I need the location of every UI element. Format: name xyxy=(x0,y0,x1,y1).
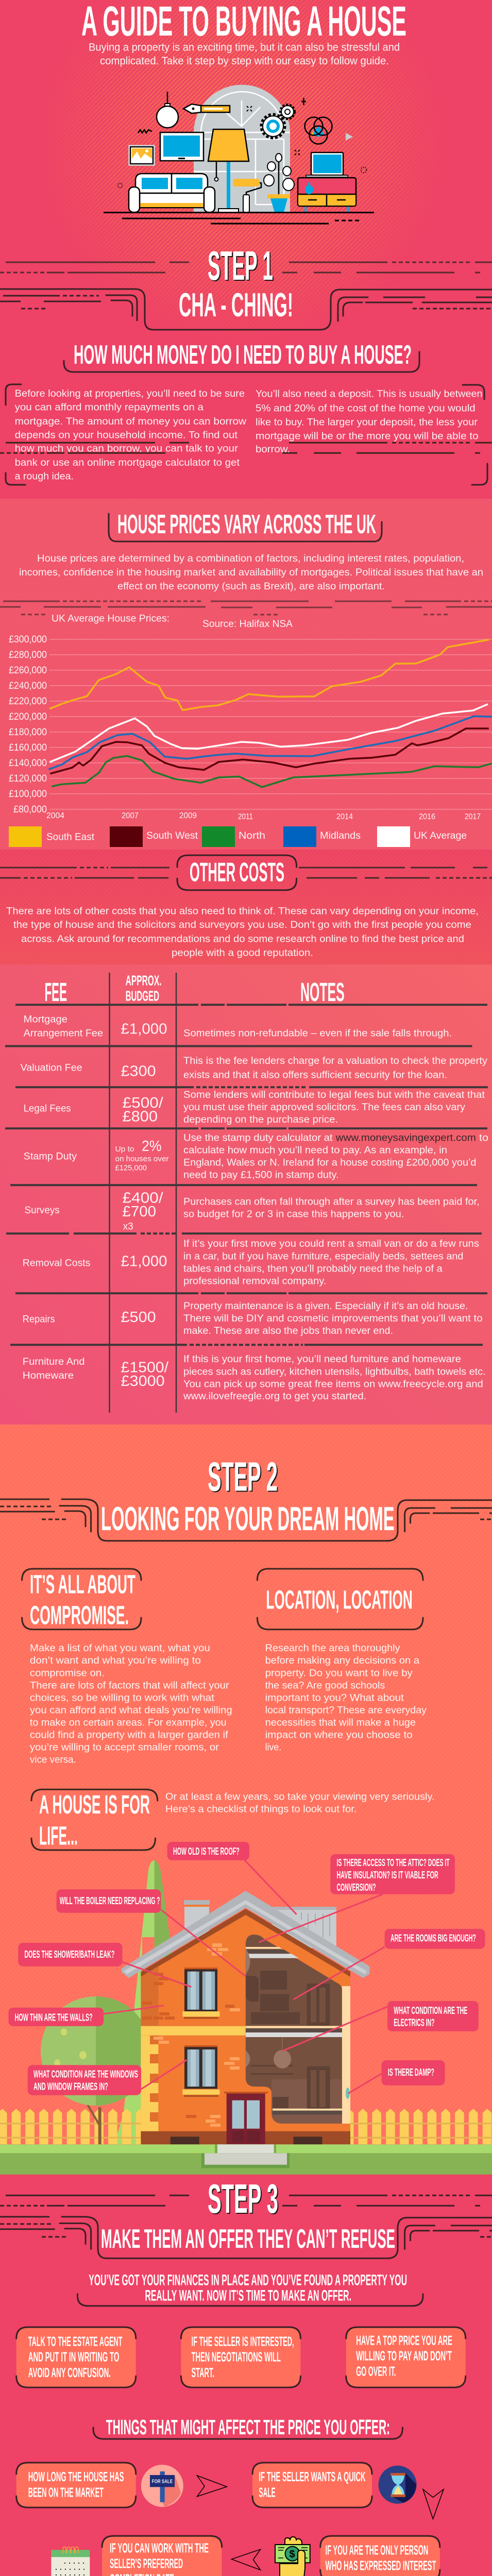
background: cost table panel xyxy=(0,964,492,1425)
row: stamp duty: to xyxy=(479,1132,488,1143)
factor box: time on market: HOW LONG THE HOUSE HAS xyxy=(28,2469,124,2484)
factor box: completion date: SELLER’S PREFERRED xyxy=(110,2555,183,2571)
row: removal costs: tables and chairs, then you’ll probably need the help of a xyxy=(183,1263,443,1274)
small play triangle xyxy=(346,133,353,141)
deposit left column: a rough idea. xyxy=(15,471,74,482)
row: surveys: £400/ xyxy=(123,1190,164,1206)
step 3 heading xyxy=(0,2176,492,2258)
two column text panel xyxy=(6,384,487,485)
legend: UK Average xyxy=(414,831,467,841)
row: legal fees: £800 xyxy=(123,1109,158,1125)
line chart: UK average house prices xyxy=(9,614,492,847)
factor box: time on market: BEEN ON THE MARKET xyxy=(28,2485,104,2500)
location text: before making any decisions on a xyxy=(265,1655,419,1666)
deposit left column: mortgage. The amount of money you can borrow xyxy=(15,416,247,427)
row: removal costs xyxy=(23,1239,479,1286)
compromise text: compromise on. xyxy=(30,1668,105,1679)
row: valuation fee: Valuation Fee xyxy=(21,1062,82,1073)
callout: electrics: ELECTRICS IN? xyxy=(394,2018,435,2029)
cha-ching heading: CHA - CHING! xyxy=(179,286,293,324)
callout: walls xyxy=(8,2006,164,2026)
x axis labels: 2004 xyxy=(46,811,64,820)
y axis labels: £280,000 xyxy=(9,650,47,660)
illustration: house cross-section xyxy=(0,1860,492,2175)
checklist callouts xyxy=(8,1842,485,2095)
deposit right column: You’ll also need a deposit. This is usually between xyxy=(256,388,483,400)
row: stamp duty: England, Wales or N. Ireland for a house costing £200,000 you’d xyxy=(183,1157,476,1168)
row: valuation fee xyxy=(21,1056,488,1080)
framed picture xyxy=(129,145,155,165)
row: mortgage arrangement fee: £1,000 xyxy=(121,1021,167,1038)
a house is for life heading: LIFE... xyxy=(39,1821,78,1851)
roof underside band xyxy=(141,1909,350,1977)
floor lines xyxy=(104,212,374,224)
location text: important to you? What about xyxy=(265,1692,404,1703)
legend: North xyxy=(239,831,265,841)
series: South East xyxy=(49,640,489,710)
pen tool xyxy=(183,104,230,113)
compromise frame xyxy=(22,1569,141,1630)
deposit right column: 5% and 20% of the cost of the home you would xyxy=(256,402,476,414)
compromise text: you’re willing to accept smaller rooms, or xyxy=(30,1742,219,1753)
deposit left column: bank or use an online mortgage calculator to get xyxy=(15,457,240,468)
step 3 rules xyxy=(0,2195,492,2206)
factor box: time on market xyxy=(16,2463,136,2507)
callout: windows: WHAT CONDITION ARE THE WINDOWS xyxy=(33,2069,138,2080)
sofa xyxy=(129,174,215,212)
callout: damp: IS THERE DAMP? xyxy=(388,2067,434,2078)
row: repairs: make. These are also the jobs than never end. xyxy=(183,1326,393,1336)
y axis labels: £80,000 xyxy=(13,804,47,815)
checklist intro text: Or at least a few years, so take your viewing very seriously. xyxy=(165,1791,435,1802)
row: stamp duty: £125,000 xyxy=(115,1164,147,1173)
compromise text: vice versa. xyxy=(30,1754,76,1765)
y axis labels xyxy=(9,634,47,815)
factor box: only person xyxy=(320,2536,440,2576)
series: South West xyxy=(50,728,489,774)
row: stamp duty: Stamp Duty xyxy=(24,1151,77,1162)
step rules xyxy=(0,262,492,273)
compromise text: to make on certain areas. For example, you xyxy=(30,1717,227,1728)
row: repairs: Property maintenance is a given. Especially if it’s an old house. xyxy=(183,1301,468,1312)
row: furniture and homeware: pieces such as cutlery, kitchen utensils, lightbulbs, bath towels etc. xyxy=(183,1366,486,1377)
location text: impact on where you choose to xyxy=(265,1730,413,1740)
illustration: furnished room xyxy=(104,85,374,224)
row: stamp duty: Up to xyxy=(115,1145,134,1154)
tip box: estate agent: TALK TO THE ESTATE AGENT xyxy=(28,2333,123,2349)
step 2 heading xyxy=(0,443,492,1541)
venn diagram xyxy=(305,117,332,144)
row: stamp duty: on houses over xyxy=(115,1155,169,1163)
deposit left column: depends on your household income. To find out xyxy=(15,430,238,441)
row: stamp duty xyxy=(24,1132,488,1180)
foundation xyxy=(141,2131,350,2144)
row: furniture and homeware: If this is your first home, you’ll need furniture and homeware xyxy=(183,1354,461,1365)
location block xyxy=(257,1569,427,1753)
row: stamp duty: calculate how much you’ll need to pay. As an example, in xyxy=(183,1145,447,1156)
deposit right column: like to buy. The larger your deposit, the less your xyxy=(256,417,478,428)
legend: South East xyxy=(46,832,95,843)
row: furniture and homeware: www.ilovefreegle.org to get you started. xyxy=(183,1391,366,1402)
cypress tree xyxy=(114,1860,173,2144)
table header xyxy=(44,973,345,1007)
a house is for life heading xyxy=(31,1789,158,1851)
compromise block xyxy=(22,1569,232,1765)
house walls xyxy=(141,1915,350,2131)
row: furniture and homeware xyxy=(23,1354,486,1402)
row: stamp duty: www.moneysavingexpert.com xyxy=(335,1132,476,1143)
callout: windows xyxy=(28,2060,186,2095)
row: surveys xyxy=(25,1190,480,1232)
background: intro and step 1 panel xyxy=(0,0,492,499)
other costs heading xyxy=(0,855,492,890)
location text: necessities that will make a huge xyxy=(265,1717,416,1728)
row: furniture and homeware: £1500/ xyxy=(121,1359,169,1376)
x axis labels: 2017 xyxy=(465,812,481,821)
offer frame xyxy=(0,2217,492,2258)
x axis labels xyxy=(46,811,481,821)
intro text: Buying a property is an exciting time, but it can also be stressful and xyxy=(89,41,400,54)
row: valuation fee: exists and that it also offers sufficient security for the loan. xyxy=(183,1070,447,1080)
other costs text: across. Ask around for recommendations and do some research online to find the best price and xyxy=(21,933,464,944)
back extension and chimney xyxy=(184,1900,336,1948)
other costs text: There are lots of other costs that you also need to think of. These can vary depending on your income, xyxy=(6,905,479,917)
factor box: completion date: IF YOU CAN WORK WITH THE xyxy=(110,2540,209,2555)
row: repairs xyxy=(23,1301,483,1336)
location text xyxy=(265,1643,427,1753)
round tree xyxy=(41,1996,151,2144)
tip box: negotiations: THEN NEGOTIATIONS WILL xyxy=(192,2349,281,2364)
factor box: quick sale: SALE xyxy=(259,2485,276,2500)
location text: Research the area thoroughly xyxy=(265,1643,400,1654)
row: surveys: £700 xyxy=(123,1204,156,1220)
tip box: estate agent: AVOID ANY CONFUSION. xyxy=(28,2365,111,2380)
background: step 3 panel xyxy=(0,2174,492,2576)
other costs heading: OTHER COSTS xyxy=(190,858,284,888)
a house is for life heading: A HOUSE IS FOR xyxy=(39,1790,150,1819)
y axis labels: £160,000 xyxy=(9,742,47,753)
deposit left column: how much you can borrow, you can talk to your xyxy=(15,443,239,454)
interior furniture xyxy=(246,1971,330,2109)
other costs text: people with a good reputation. xyxy=(172,947,313,958)
y axis labels: £140,000 xyxy=(9,758,47,769)
deposit left column: Before looking at properties, you’ll need to be sure xyxy=(15,388,245,399)
icon: hand holding money xyxy=(275,2537,310,2576)
row: removal costs: Removal Costs xyxy=(23,1258,90,1269)
step 3 heading: STEP 3 xyxy=(208,2176,278,2222)
wavy squiggle xyxy=(138,130,152,133)
x axis labels: 2009 xyxy=(179,811,197,820)
row: surveys: Purchases can often fall through after a survey has been paid for, xyxy=(183,1196,480,1207)
series: North xyxy=(52,756,492,787)
arrow: right xyxy=(197,2476,227,2497)
shaded brick corner xyxy=(141,1966,159,2131)
callout: damp xyxy=(348,2060,445,2093)
compromise text: don’t want and what you’re willing to xyxy=(30,1655,201,1666)
table: fees: NOTES xyxy=(300,977,345,1007)
legend xyxy=(9,826,467,847)
compromise text: Make a list of what you want, what you xyxy=(30,1643,210,1654)
compromise heading: COMPROMISE. xyxy=(30,1601,129,1630)
step 2 rules xyxy=(0,443,492,453)
upper window xyxy=(182,1968,219,2019)
row: legal fees: Some lenders will contribute to legal fees but with the caveat that xyxy=(183,1090,485,1100)
damp patch xyxy=(346,2088,350,2099)
cha-ching frame xyxy=(0,289,492,330)
row: valuation fee: £300 xyxy=(121,1063,156,1079)
gears xyxy=(261,105,295,138)
make an offer subheading xyxy=(77,2272,423,2306)
tip box: estate agent: AND PUT IT IN WRITING TO xyxy=(28,2349,119,2364)
corner brackets xyxy=(6,384,487,485)
tip box: negotiations: START. xyxy=(192,2365,214,2380)
storey band xyxy=(141,2026,246,2036)
factor box: quick sale: IF THE SELLER WANTS A QUICK xyxy=(259,2469,366,2484)
fence xyxy=(0,2109,492,2144)
front door xyxy=(224,2092,268,2144)
y axis labels: £200,000 xyxy=(9,711,47,722)
callout: shower: DOES THE SHOWER/BATH LEAK? xyxy=(25,1949,114,1960)
callout: roof xyxy=(167,1842,297,1914)
decorative marks xyxy=(117,98,367,188)
laptop xyxy=(306,152,348,177)
potted plant xyxy=(264,154,294,212)
arrow: left xyxy=(231,2549,261,2570)
deposit right column: borrow. xyxy=(256,444,290,455)
cut-away interior xyxy=(246,1935,350,2124)
callout: windows: AND WINDOW FRAMES IN? xyxy=(33,2081,108,2093)
row: mortgage arrangement fee: Mortgage xyxy=(24,1014,67,1025)
row: stamp duty: Use the stamp duty calculator at xyxy=(183,1132,333,1143)
row: surveys: so budget for 2 or 3 in case this happens to you. xyxy=(183,1209,404,1219)
row: stamp duty: need to pay £1,500 in stamp duty. xyxy=(183,1170,339,1180)
table rules xyxy=(5,973,488,1413)
series: Midlands xyxy=(48,716,492,769)
floor lamp xyxy=(208,129,249,212)
compromise heading: IT’S ALL ABOUT xyxy=(30,1570,135,1599)
location text: local transport? These are everyday xyxy=(265,1705,427,1716)
tip box: estate agent xyxy=(16,2327,136,2387)
lower window xyxy=(182,2045,219,2097)
background: other costs panel xyxy=(0,850,492,964)
legend: South West xyxy=(146,831,198,841)
y axis labels: £180,000 xyxy=(9,727,47,738)
house prices text: effect on the economy (such as Brexit), are also important. xyxy=(117,581,385,592)
table header: BUDGED xyxy=(126,988,159,1004)
callout: attic xyxy=(259,1854,455,1942)
row: surveys: x3 xyxy=(123,1222,133,1232)
compromise text: choices, so be willing to work with what xyxy=(30,1692,215,1703)
row: repairs: Repairs xyxy=(23,1314,55,1325)
x axis labels: 2007 xyxy=(122,811,139,820)
step 2 heading: STEP 2 xyxy=(208,1453,278,1499)
house prices text: incomes, confidence in the housing market and availability of mortgages. Political issues that have an xyxy=(19,567,483,578)
house prices heading xyxy=(109,510,382,541)
arrow: down xyxy=(423,2489,444,2519)
callout: walls: HOW THIN ARE THE WALLS? xyxy=(15,2012,93,2023)
checklist intro text xyxy=(165,1791,435,1815)
compromise heading xyxy=(30,1570,135,1630)
lawn xyxy=(0,2144,492,2175)
deposit left column xyxy=(15,388,247,482)
table header: FEE xyxy=(44,977,67,1007)
compromise text xyxy=(30,1643,232,1765)
deposit right column xyxy=(256,388,483,455)
row: furniture and homeware: £3000 xyxy=(121,1373,165,1389)
intro text xyxy=(89,41,400,67)
chart title: UK Average House Prices: xyxy=(52,614,169,624)
table: fees xyxy=(5,973,488,1413)
row: repairs: £500 xyxy=(121,1309,156,1326)
row: mortgage arrangement fee: Arrangement Fee xyxy=(24,1028,103,1039)
y axis labels: £240,000 xyxy=(9,681,47,691)
row: legal fees: you must use their approved solicitors. The fees can also vary xyxy=(183,1102,466,1113)
location frame xyxy=(257,1569,423,1630)
icon: for sale sign xyxy=(141,2465,183,2507)
gridlines xyxy=(49,639,492,809)
factor box: completion date xyxy=(102,2536,222,2576)
compromise text: you can afford and what deals you’re willing xyxy=(30,1705,232,1716)
chart source: Source: Halifax NSA xyxy=(202,619,293,630)
row: removal costs: in a car, but if you have furniture, especially beds, settees and xyxy=(183,1251,464,1262)
callout: shower xyxy=(18,1943,192,1987)
callout: electrics xyxy=(282,2001,479,2051)
tip box: negotiations: IF THE SELLER IS INTERESTED, xyxy=(192,2333,294,2349)
dream home frame xyxy=(0,1499,492,1541)
row: removal costs: £1,000 xyxy=(121,1253,167,1270)
compromise text: There are lots of factors that will affect your xyxy=(30,1680,229,1691)
y axis labels: £120,000 xyxy=(9,773,47,784)
x axis labels: 2014 xyxy=(336,812,353,821)
table header: APPROX. xyxy=(126,973,162,989)
tip box: negotiations xyxy=(181,2327,300,2387)
deposit left column: you can afford monthly repayments on a xyxy=(15,402,203,413)
pendant lamp xyxy=(157,92,178,128)
floor dashes xyxy=(335,219,360,222)
legend: Midlands xyxy=(320,831,361,841)
intro text: complicated. Take it step by step with our easy to follow guide. xyxy=(100,55,389,67)
row: furniture and homeware: Furniture And xyxy=(23,1357,84,1367)
y axis labels: £100,000 xyxy=(9,789,47,800)
row: mortgage arrangement fee xyxy=(24,1014,452,1039)
y axis labels: £260,000 xyxy=(9,665,47,676)
step 1 heading: STEP 1 xyxy=(208,243,273,289)
location text: the sea? Are good schools xyxy=(265,1680,385,1691)
factor box: quick sale xyxy=(252,2463,372,2507)
other costs text: the type of house and the solicitors and surveyors you use. Don’t go with the first people you come xyxy=(13,919,471,930)
roof xyxy=(122,1891,369,1978)
callout: boiler: WILL THE BOILER NEED REPLACING ? xyxy=(60,1895,160,1907)
bricks xyxy=(142,1943,240,2127)
row: mortgage arrangement fee: Sometimes non-refundable – even if the sale falls through. xyxy=(183,1028,452,1039)
icon: for sale sign: FOR SALE xyxy=(152,2479,173,2484)
callout: boiler xyxy=(57,1889,246,1976)
row: legal fees: Legal Fees xyxy=(24,1103,71,1114)
series: UK Average xyxy=(49,704,488,762)
row: stamp duty: 2% xyxy=(142,1138,162,1155)
checklist intro text: Here’s a checklist of things to look out for. xyxy=(165,1804,357,1815)
television xyxy=(160,132,203,161)
x axis labels: 2011 xyxy=(238,812,253,821)
house prices text: House prices are determined by a combination of factors, including interest rates, population, xyxy=(37,553,464,564)
compromise text: could find a property with a larger garden if xyxy=(30,1730,228,1740)
location text: property. Do you want to live by xyxy=(265,1668,413,1679)
row: repairs: There will be DIY and cosmetic improvements that you’ll want to xyxy=(183,1313,483,1324)
callout: roof: HOW OLD IS THE ROOF? xyxy=(173,1846,240,1857)
row: removal costs: If it’s your first move you could rent a small van or do a few runs xyxy=(183,1239,479,1249)
arched window xyxy=(194,85,290,212)
paint roller xyxy=(233,179,261,212)
row: furniture and homeware: Homeware xyxy=(23,1370,74,1381)
row: valuation fee: This is the fee lenders charge for a valuation to check the property xyxy=(183,1056,488,1066)
background: step 2 panel xyxy=(0,1425,492,2175)
house prices text xyxy=(19,553,483,592)
tip box: top price: GO OVER IT. xyxy=(356,2364,396,2379)
step 1 heading xyxy=(0,243,492,330)
row: legal fees: £500/ xyxy=(123,1095,164,1111)
front steps xyxy=(201,2144,290,2168)
x axis labels: 2016 xyxy=(419,812,435,821)
icon: hourglass xyxy=(379,2466,417,2504)
other costs text xyxy=(6,905,479,958)
deposit right column: mortgage will be or the more you will be able to xyxy=(256,431,479,442)
callout: rooms xyxy=(293,1929,485,1999)
row: furniture and homeware: You can pick up some great free items on www.freecycle.org and xyxy=(183,1379,483,1389)
row: removal costs: professional removal company. xyxy=(183,1276,326,1286)
row: surveys: Surveys xyxy=(25,1205,60,1216)
y axis labels: £300,000 xyxy=(9,634,47,645)
icon: hand holding money: $ xyxy=(290,2549,295,2560)
row: legal fees xyxy=(24,1090,485,1125)
icon: calendar xyxy=(51,2547,90,2576)
y axis labels: £220,000 xyxy=(9,696,47,707)
row: legal fees: depending on the purchase price. xyxy=(183,1114,338,1125)
location text: live. xyxy=(265,1742,281,1753)
background: house prices panel xyxy=(0,499,492,850)
sideboard xyxy=(298,178,356,212)
tip box: top price xyxy=(346,2327,466,2387)
decorative dashed rules above chart xyxy=(0,601,492,615)
callout: attic: CONVERSION? xyxy=(337,1882,376,1893)
